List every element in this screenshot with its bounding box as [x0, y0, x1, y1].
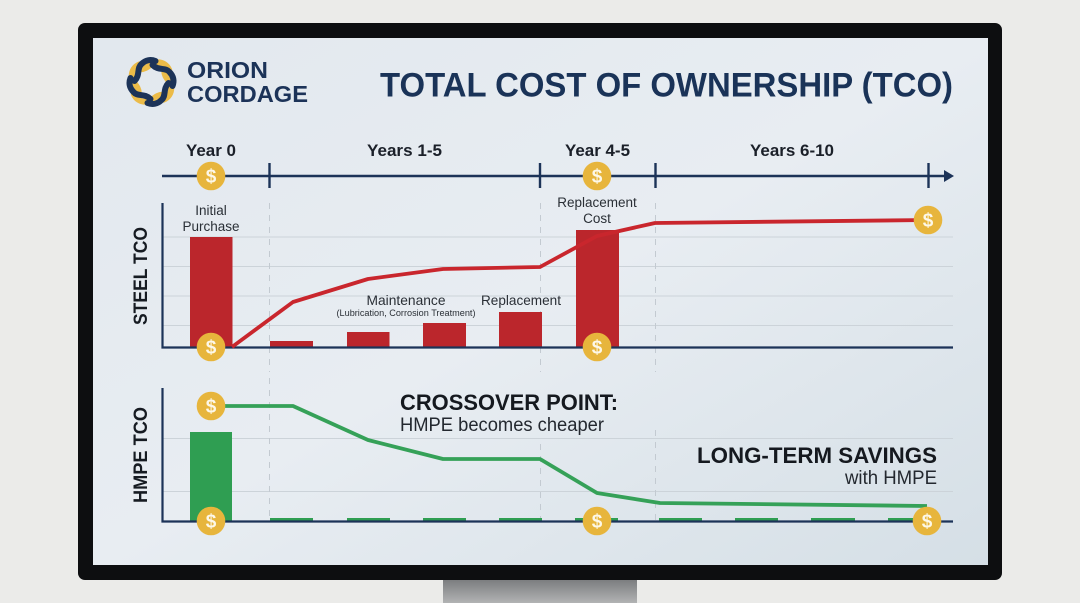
- timeline labels: Year 0: [186, 142, 236, 160]
- label: maintenance: Maintenance: [366, 292, 446, 308]
- timeline labels: Years 1-5: [367, 142, 442, 160]
- logo wordmark: ORION: [187, 57, 268, 83]
- label: maintenance: (Lubrication, Corrosion Treatment): [336, 308, 476, 318]
- HMPE coins: [197, 392, 941, 535]
- monitor bezel: [78, 23, 1002, 580]
- callout: long-term savings: [697, 443, 937, 489]
- HMPE TCO chart: [131, 378, 953, 535]
- HMPE bars: [190, 432, 928, 522]
- grid lines: [163, 237, 953, 326]
- label: replacement: Replacement: [481, 292, 561, 308]
- title: TOTAL COST OF OWNERSHIP (TCO): [380, 66, 953, 104]
- period dividers: [270, 203, 656, 372]
- HMPE cost line: [225, 406, 927, 506]
- callout: crossover point: [400, 390, 618, 436]
- steel cost line: [232, 220, 928, 347]
- timeline labels: [186, 142, 834, 160]
- label: initial purchase: Initial: [195, 203, 227, 218]
- label: maintenance: [336, 292, 476, 318]
- label: initial purchase: [182, 203, 240, 234]
- screen: [93, 38, 988, 565]
- steel bars: [190, 230, 619, 347]
- callout: crossover point: CROSSOVER POINT:: [400, 390, 618, 415]
- steel axes: [162, 203, 953, 348]
- callout: crossover point: HMPE becomes cheaper: [400, 415, 605, 436]
- timeline labels: Year 4-5: [565, 142, 630, 160]
- timeline: [162, 142, 954, 190]
- timeline labels: Years 6-10: [750, 142, 834, 160]
- steel coins: [197, 206, 942, 361]
- steel TCO chart: [131, 195, 953, 372]
- grid lines: [163, 438, 953, 492]
- label: replacement cost: Replacement: [557, 195, 637, 210]
- logo: Orion Cordage: [124, 54, 308, 110]
- callout: long-term savings: with HMPE: [844, 468, 937, 489]
- HMPE axis label: HMPE TCO: [131, 407, 152, 503]
- logo wordmark: [187, 57, 308, 107]
- steel axis label: STEEL TCO: [131, 227, 152, 325]
- label: replacement cost: [557, 195, 637, 226]
- period dividers: [270, 378, 656, 520]
- timeline axis arrow: [162, 163, 954, 188]
- monitor stand: [443, 578, 637, 603]
- label: replacement cost: Cost: [583, 211, 611, 226]
- icon: woven rope ring: [124, 54, 179, 110]
- timeline coins: [197, 162, 611, 190]
- label: initial purchase: Purchase: [182, 219, 240, 234]
- callout: long-term savings: LONG-TERM SAVINGS: [697, 443, 937, 468]
- logo wordmark: CORDAGE: [187, 81, 308, 107]
- HMPE axes: [162, 388, 953, 522]
